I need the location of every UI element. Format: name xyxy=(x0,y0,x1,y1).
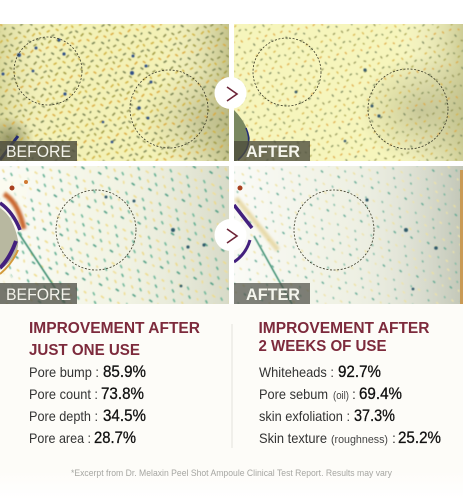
stats: two weeks: Skin texture xyxy=(259,430,327,446)
before label bottom: BEFORE xyxy=(6,285,71,304)
heading: two weeks: IMPROVEMENT AFTER xyxy=(258,320,430,337)
stats: one use: Pore depth : xyxy=(29,408,98,424)
panel: top before photo xyxy=(0,24,229,161)
stats: two weeks: 69.4% xyxy=(359,385,402,403)
stats: two weeks xyxy=(259,363,441,447)
stats: one use: Pore bump : xyxy=(29,364,99,380)
stats: one use: 34.5% xyxy=(103,407,146,425)
before label top: BEFORE xyxy=(6,142,71,161)
stats: two weeks: (roughness) xyxy=(331,434,388,446)
after label bottom xyxy=(234,283,310,304)
dashed circle bottom after xyxy=(294,190,374,270)
stats: two weeks: (oil) xyxy=(333,390,349,402)
stats: two weeks: 37.3% xyxy=(354,407,395,425)
stats: two weeks: 92.7% xyxy=(338,363,381,381)
stats: two weeks: skin exfoliation : xyxy=(259,408,350,424)
heading: one use xyxy=(29,320,200,359)
panel: bottom after photo xyxy=(234,166,463,304)
after label bottom: AFTER xyxy=(246,285,300,304)
stats: one use: Pore area : xyxy=(29,430,91,446)
dashed circle bottom before xyxy=(56,190,136,270)
dashed circle top after left xyxy=(253,38,321,106)
stats: one use: 73.8% xyxy=(101,385,144,403)
panel: one use results xyxy=(29,320,200,447)
dashed circle top before right xyxy=(130,70,208,148)
stats: two weeks: 25.2% xyxy=(398,429,441,447)
heading: two weeks xyxy=(258,320,430,355)
stats: one use: 28.7% xyxy=(94,429,136,447)
dashed circle top before left xyxy=(14,37,82,105)
after label top: AFTER xyxy=(246,142,300,161)
page background xyxy=(0,304,463,500)
stats: two weeks: : xyxy=(352,386,356,402)
icon: bottom arrow button xyxy=(214,219,246,251)
icon: top arrow button xyxy=(214,77,246,109)
dashed circle top after right xyxy=(368,69,448,149)
stats: one use: Pore count : xyxy=(29,386,98,402)
stats: one use xyxy=(29,363,146,447)
stats: two weeks: : xyxy=(392,430,396,446)
stats: two weeks: Whiteheads : xyxy=(259,364,334,380)
panel: two weeks results xyxy=(258,320,441,447)
heading: two weeks: 2 WEEKS OF USE xyxy=(258,338,386,355)
panel: top after photo xyxy=(234,24,463,165)
footnote: *Excerpt from Dr. Melaxin Peel Shot Ampoule Clinical Test Report. Results may vary xyxy=(71,468,392,479)
stats: one use: 85.9% xyxy=(103,363,146,381)
panel: bottom before photo xyxy=(0,166,229,304)
heading: one use: IMPROVEMENT AFTER xyxy=(29,320,200,337)
stats: two weeks: Pore sebum xyxy=(259,386,328,402)
heading: one use: JUST ONE USE xyxy=(29,342,140,359)
